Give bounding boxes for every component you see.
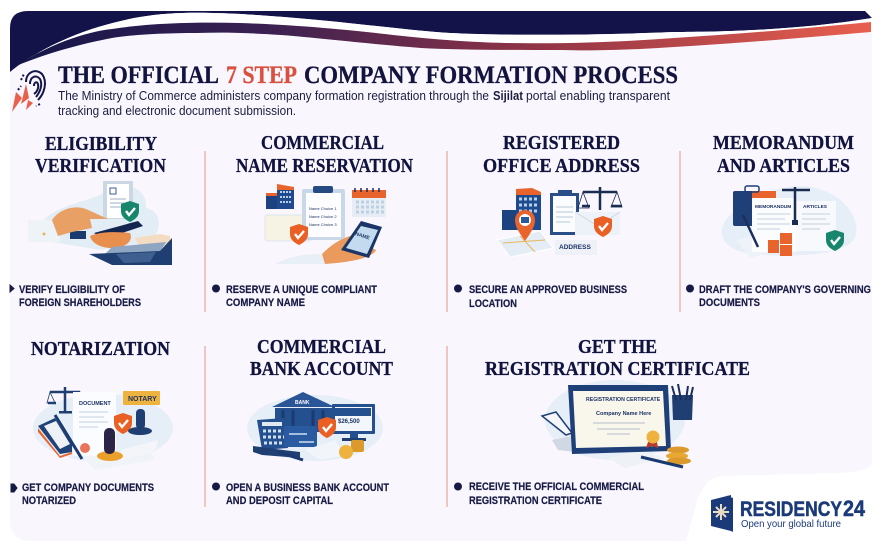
illustration: bank: $26,500 — [338, 419, 360, 425]
subtitle: portal enabling transparent — [526, 89, 671, 103]
heading: GET THE — [578, 336, 657, 358]
icon: rocket — [12, 71, 45, 112]
heading: NOTARIZATION — [31, 338, 170, 360]
heading: NAME RESERVATION — [236, 155, 413, 177]
panel: step 1 eligibility verification — [10, 133, 172, 309]
illustration: certificate: Company Name Here — [596, 411, 651, 417]
wordmark: RESIDENCY — [740, 498, 842, 521]
panel: step 6 commercial bank account — [212, 336, 393, 507]
icon: passport book — [711, 495, 733, 532]
bullet — [11, 482, 154, 507]
bullet — [454, 284, 627, 310]
bullet: FOREIGN SHAREHOLDERS — [19, 297, 141, 309]
panel: step 7 registration certificate — [454, 336, 750, 507]
illustration: name reservation — [265, 184, 386, 264]
illustration: office address: ADDRESS — [559, 244, 591, 251]
heading: OFFICE ADDRESS — [483, 155, 640, 177]
bullet: AND DEPOSIT CAPITAL — [226, 495, 333, 507]
title: THE OFFICIAL — [58, 62, 219, 89]
bullet: REGISTRATION CERTIFICATE — [469, 495, 602, 507]
bullet: GET COMPANY DOCUMENTS — [22, 482, 154, 494]
panel: step 2 commercial name reservation — [212, 132, 413, 309]
heading: COMMERCIAL — [261, 132, 384, 154]
subtitle: Sijilat — [493, 89, 524, 103]
heading: ELIGIBILITY — [45, 133, 157, 155]
illustration: name reservation: Name Choice 2 — [309, 214, 337, 219]
heading: MEMORANDUM — [713, 132, 854, 154]
illustration: notary: NOTARY — [128, 396, 157, 403]
wordmark: Open your global future — [741, 518, 841, 530]
illustration: certificate: REGISTRATION CERTIFICATE — [586, 397, 661, 403]
bullet: LOCATION — [469, 298, 517, 310]
illustration: name reservation: NAME — [354, 231, 371, 242]
heading — [250, 336, 393, 380]
subtitle: The Ministry of Commerce administers company formation registration through the — [58, 89, 489, 103]
illustration: name reservation: Name Choice 3 — [309, 222, 337, 227]
illustration: bank — [247, 392, 383, 461]
bullet — [686, 284, 871, 309]
heading — [236, 132, 413, 177]
wordmark — [740, 496, 866, 530]
heading — [35, 133, 166, 177]
illustration: hands with phone — [28, 181, 172, 265]
illustration: notary: DOCUMENT — [79, 401, 111, 407]
illustration: documents: MEMORANDUM — [755, 204, 791, 210]
header wave — [10, 11, 872, 72]
bullet: COMPANY NAME — [226, 297, 305, 309]
heading — [713, 132, 854, 177]
illustration: bank: BANK — [295, 400, 310, 406]
illustration: office address — [497, 187, 622, 257]
heading: COMMERCIAL — [257, 336, 386, 358]
bullet: RESERVE A UNIQUE COMPLIANT — [226, 284, 377, 296]
title: COMPANY FORMATION PROCESS — [304, 62, 678, 89]
heading: REGISTRATION CERTIFICATE — [485, 358, 750, 380]
bullet: VERIFY ELIGIBILITY OF — [19, 284, 125, 296]
title — [58, 62, 678, 89]
subtitle — [58, 89, 671, 118]
heading: BANK ACCOUNT — [250, 358, 393, 380]
logo block — [686, 462, 874, 541]
wordmark: 24 — [843, 496, 866, 521]
bullet: RECEIVE THE OFFICIAL COMMERCIAL — [469, 481, 644, 493]
bullet: DOCUMENTS — [699, 297, 760, 309]
heading — [483, 132, 640, 177]
heading: VERIFICATION — [35, 155, 166, 177]
bullet — [212, 284, 377, 309]
illustration: certificate — [542, 380, 693, 468]
bullet — [212, 482, 389, 507]
title: 7 STEP — [226, 62, 297, 89]
bullet — [454, 481, 644, 507]
heading — [485, 336, 750, 380]
heading: AND ARTICLES — [717, 155, 850, 177]
bullet: OPEN A BUSINESS BANK ACCOUNT — [226, 482, 389, 494]
illustration: documents — [722, 186, 857, 258]
bullet: SECURE AN APPROVED BUSINESS — [469, 284, 627, 296]
panel: step 5 notarization — [11, 338, 173, 507]
subtitle: tracking and electronic document submission. — [58, 104, 296, 118]
panel: step 4 memorandum and articles — [686, 132, 871, 309]
dividers — [204, 151, 681, 507]
illustration: documents: ARTICLES — [803, 204, 828, 210]
panel: step 3 registered office address — [454, 132, 640, 310]
heading: REGISTERED — [503, 132, 620, 154]
illustration: name reservation: Name Choice 1 — [309, 206, 337, 211]
bullet: NOTARIZED — [22, 495, 76, 507]
bullet — [10, 284, 141, 309]
illustration: notary — [33, 387, 173, 470]
